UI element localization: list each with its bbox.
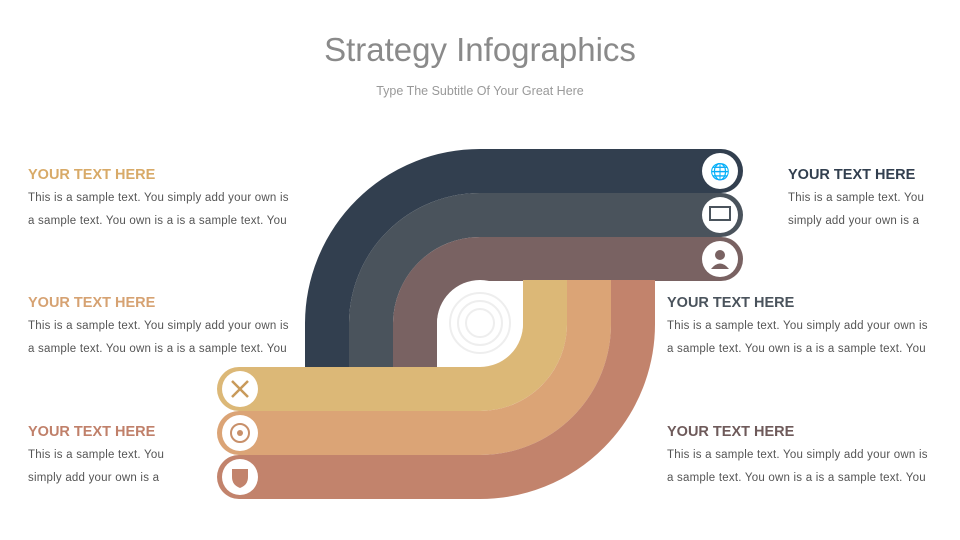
band: orange	[217, 280, 589, 455]
text: left 1: YOUR TEXT HERE	[28, 167, 155, 183]
text: left 1: This is a sample text. You simply add your own is	[28, 192, 289, 204]
band: dark	[327, 149, 743, 368]
band: dark: 🌐	[710, 162, 730, 181]
text: right 2	[667, 295, 928, 355]
text: right 3: a sample text. You own is a is a sample text. You	[667, 472, 926, 484]
band: tan	[217, 280, 545, 411]
text: right 3	[667, 424, 928, 484]
text: right 1: simply add your own is a	[788, 215, 919, 227]
band: gray	[371, 193, 743, 368]
text: left 3: YOUR TEXT HERE	[28, 424, 155, 440]
subtitle: Type The Subtitle Of Your Great Here	[376, 84, 584, 98]
text: right 1: YOUR TEXT HERE	[788, 167, 915, 183]
text: left 1	[28, 167, 289, 227]
text: left 3: simply add your own is a	[28, 472, 159, 484]
center circle	[437, 280, 523, 366]
text: left 2: a sample text. You own is a is a sample text. You	[28, 343, 287, 355]
band: rust	[217, 280, 633, 499]
text: right 2: a sample text. You own is a is a sample text. You	[667, 343, 926, 355]
text: right 1: This is a sample text. You	[788, 192, 924, 204]
text: right 1	[788, 167, 924, 227]
band: brown	[415, 237, 743, 368]
text: left 3: This is a sample text. You	[28, 449, 164, 461]
text: left 3	[28, 424, 164, 484]
text: left 1: a sample text. You own is a is a sample text. You	[28, 215, 287, 227]
text: right 2: This is a sample text. You simply add your own is	[667, 320, 928, 332]
text: right 2: YOUR TEXT HERE	[667, 295, 794, 311]
text: right 3: YOUR TEXT HERE	[667, 424, 794, 440]
text: left 2: This is a sample text. You simply add your own is	[28, 320, 289, 332]
text: left 2: YOUR TEXT HERE	[28, 295, 155, 311]
text: left 2	[28, 295, 289, 355]
title: Strategy Infographics	[324, 31, 636, 68]
text: right 3: This is a sample text. You simply add your own is	[667, 449, 928, 461]
